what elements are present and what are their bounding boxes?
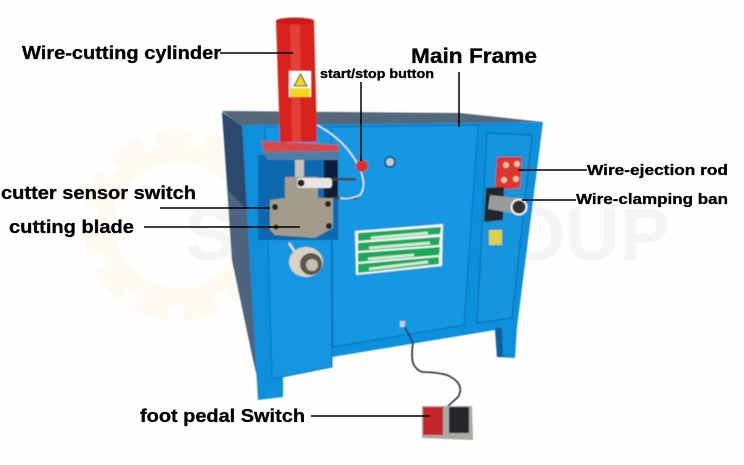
watermark: gear logo and group name: STAY GROUP xyxy=(185,193,670,276)
machine: rear rim xyxy=(222,111,543,127)
label: Main Frame xyxy=(411,45,537,127)
machine: left frame strip xyxy=(265,127,332,379)
wire-ejection block xyxy=(495,157,522,190)
label: cutter sensor switch: cutter sensor switch xyxy=(1,182,196,203)
machine: side panel xyxy=(222,112,259,385)
start/stop button xyxy=(356,160,368,172)
watermark: gear logo and group name xyxy=(92,139,670,311)
foot pedal switch xyxy=(422,406,473,440)
label: start/stop button xyxy=(320,67,434,161)
label: Main Frame: Main Frame xyxy=(411,45,537,68)
machine: door xyxy=(331,125,478,347)
machine xyxy=(222,18,543,440)
cylinder base plate xyxy=(261,141,339,153)
mounting recess xyxy=(258,155,338,240)
label: Wire-cutting cylinder: Wire-cutting cylinder xyxy=(22,42,221,63)
wire-clamping tube xyxy=(484,187,526,222)
cutter plunger xyxy=(295,160,304,180)
label: foot pedal Switch: foot pedal Switch xyxy=(140,405,305,426)
cutter sensor xyxy=(297,178,332,188)
panel knob xyxy=(385,157,395,167)
wheel xyxy=(289,243,323,277)
label: Wire-clamping ban: Wire-clamping ban xyxy=(576,191,728,208)
machine: right door frame xyxy=(477,133,532,323)
machine: front face xyxy=(242,122,543,400)
wires xyxy=(317,125,364,199)
green instruction plate xyxy=(355,224,443,275)
label: Wire-ejection rod: Wire-ejection rod xyxy=(587,162,728,179)
wire-cutting cylinder xyxy=(276,18,317,142)
cutting blade block xyxy=(270,177,333,238)
warning label xyxy=(289,71,311,97)
foot switch cable xyxy=(402,323,460,407)
yellow caution sticker xyxy=(489,230,502,245)
label: start/stop button: start/stop button xyxy=(320,67,434,81)
label: cutting blade: cutting blade xyxy=(9,216,134,237)
